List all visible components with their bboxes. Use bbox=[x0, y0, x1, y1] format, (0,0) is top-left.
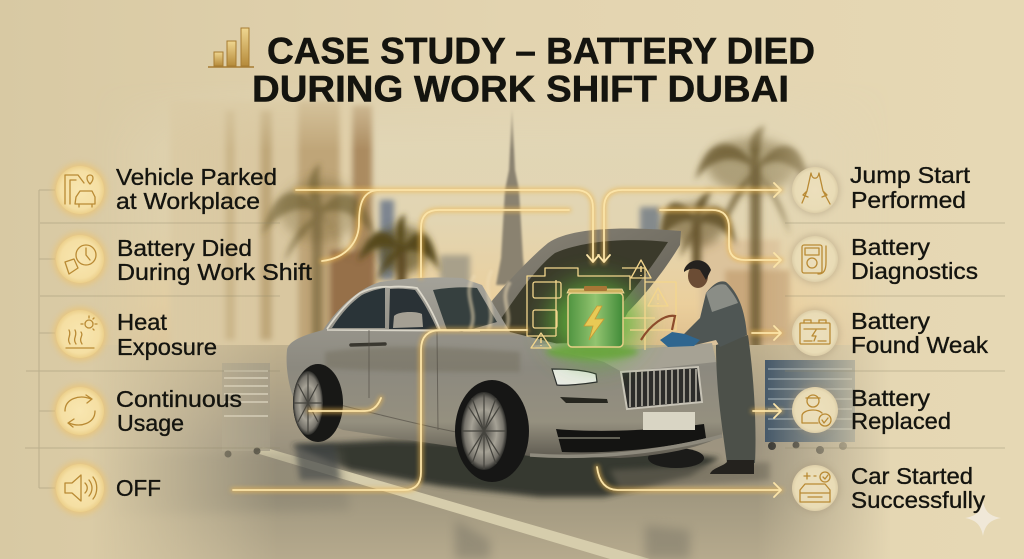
icon: technician with check bbox=[790, 385, 840, 435]
Dubai skyline and palms bbox=[170, 100, 810, 360]
label: Battery bbox=[851, 385, 931, 411]
label: During Work Shift bbox=[117, 259, 313, 285]
shoulder panel bbox=[706, 284, 738, 312]
connector: found weak bbox=[752, 326, 781, 340]
connector: battery died curve bbox=[322, 190, 380, 261]
right dividers bbox=[785, 223, 1005, 448]
mirror bbox=[393, 312, 423, 328]
battery with circuit bbox=[527, 260, 676, 362]
roof chrome bbox=[327, 287, 440, 330]
item: battery died bbox=[53, 232, 313, 286]
label: at Workplace bbox=[116, 188, 260, 214]
item: found weak bbox=[790, 308, 989, 358]
bolt icon bbox=[584, 306, 604, 340]
palm foliage haze bbox=[280, 137, 797, 274]
label: Diagnostics bbox=[851, 258, 978, 284]
tool cart left bbox=[222, 363, 270, 458]
sky bbox=[151, 132, 862, 345]
gold connector lines bbox=[233, 183, 781, 497]
connector glow bbox=[233, 190, 781, 490]
rear wheel bbox=[293, 364, 343, 442]
rear side window bbox=[332, 288, 385, 328]
item: continuous usage bbox=[53, 384, 242, 438]
battery terminal bbox=[584, 286, 607, 291]
battery lid bbox=[567, 289, 624, 293]
left palm bbox=[262, 163, 376, 355]
connector: car started bbox=[597, 467, 781, 497]
circuit module bbox=[533, 282, 561, 298]
label: Successfully bbox=[851, 487, 986, 513]
windshield bbox=[433, 287, 497, 332]
item: off bbox=[53, 461, 161, 515]
title line 1: CASE STUDY – BATTERY DIED bbox=[267, 30, 815, 72]
front side window bbox=[389, 289, 437, 329]
item: replaced bbox=[790, 385, 951, 435]
legs bbox=[716, 335, 756, 463]
icon: speaker bbox=[53, 461, 107, 515]
label: Exposure bbox=[117, 334, 217, 360]
connector: jump start and down arrow bbox=[598, 183, 781, 262]
connector: off bbox=[233, 330, 527, 490]
warning triangle bbox=[531, 333, 551, 348]
front wheel bbox=[455, 380, 529, 482]
circuit module bbox=[533, 310, 557, 328]
door seams bbox=[343, 330, 455, 432]
head bbox=[684, 260, 711, 288]
warning triangle bbox=[631, 260, 651, 278]
bonnet top bbox=[530, 343, 716, 372]
label: Battery bbox=[851, 234, 931, 260]
green glow bbox=[549, 282, 641, 362]
door reflection band bbox=[325, 347, 520, 372]
label: Vehicle Parked bbox=[116, 164, 277, 190]
label: Continuous bbox=[116, 386, 242, 412]
torso bbox=[682, 281, 747, 347]
item: jump start bbox=[790, 162, 971, 215]
belt chrome bbox=[327, 330, 480, 331]
icon: parked car bbox=[53, 163, 107, 217]
icon: bar chart bbox=[208, 28, 254, 67]
photo scene bbox=[114, 101, 877, 559]
item: heat exposure bbox=[53, 307, 217, 361]
open bonnet bbox=[470, 229, 681, 345]
label: Car Started bbox=[851, 463, 973, 489]
connector: continuous usage bbox=[309, 398, 381, 411]
door handle bbox=[351, 344, 385, 345]
wet floor bbox=[114, 345, 877, 559]
label: Battery Died bbox=[117, 235, 252, 261]
gloved hands bbox=[660, 332, 700, 347]
connector: top loop bbox=[421, 210, 569, 277]
icon: clock and battery bbox=[53, 232, 107, 286]
label: Replaced bbox=[851, 408, 951, 434]
right small palm bbox=[660, 190, 736, 272]
icon: jumper clamps bbox=[790, 165, 840, 215]
car body bbox=[287, 277, 723, 458]
circuit lines bbox=[527, 268, 676, 350]
item: diagnostics bbox=[790, 234, 978, 284]
smoke wisps bbox=[469, 270, 510, 330]
tool cart right bbox=[765, 360, 855, 454]
icon: cycle arrows bbox=[53, 384, 107, 438]
icon: car with check bbox=[790, 463, 840, 513]
label: Usage bbox=[117, 410, 184, 436]
vent strip bbox=[558, 437, 620, 439]
mechanic bbox=[641, 260, 756, 474]
icon: sparkle bbox=[965, 501, 1001, 536]
connector: diagnostics bbox=[660, 210, 781, 267]
item: vehicle parked bbox=[53, 163, 277, 217]
number plate bbox=[643, 412, 695, 430]
label: Jump Start bbox=[850, 162, 971, 188]
title line 2: DURING WORK SHIFT DUBAI bbox=[252, 68, 789, 110]
panel: resolution bbox=[790, 162, 989, 513]
label: Battery bbox=[851, 308, 931, 334]
icon: battery bbox=[790, 308, 840, 358]
front lower vent bbox=[556, 424, 706, 452]
title bbox=[208, 28, 815, 110]
car bbox=[287, 229, 723, 482]
warning triangle bbox=[648, 288, 668, 306]
label: Found Weak bbox=[851, 332, 989, 358]
label: Heat bbox=[117, 309, 168, 335]
label: OFF bbox=[116, 475, 161, 501]
item: car started bbox=[790, 463, 986, 513]
right large palm bbox=[695, 125, 810, 355]
mid palm bbox=[358, 214, 440, 295]
icon: heat waves and sun bbox=[53, 307, 107, 361]
connector: replaced bbox=[753, 404, 781, 418]
fog vent bbox=[560, 397, 608, 403]
splitter bbox=[530, 436, 722, 456]
battery cell bbox=[568, 293, 623, 347]
headlight bbox=[552, 369, 597, 385]
left tree and dividers bbox=[25, 190, 280, 488]
panel: causes bbox=[53, 163, 313, 515]
engine bay bbox=[502, 240, 668, 344]
boots bbox=[710, 460, 754, 474]
grille bbox=[621, 367, 702, 409]
jumper tool bbox=[641, 316, 675, 340]
connector: top-left to down arrow bbox=[296, 190, 599, 262]
under-car tyre bbox=[648, 448, 704, 468]
label: Performed bbox=[851, 187, 966, 213]
Burj tower bbox=[496, 108, 526, 285]
icon: multimeter bbox=[790, 234, 840, 284]
